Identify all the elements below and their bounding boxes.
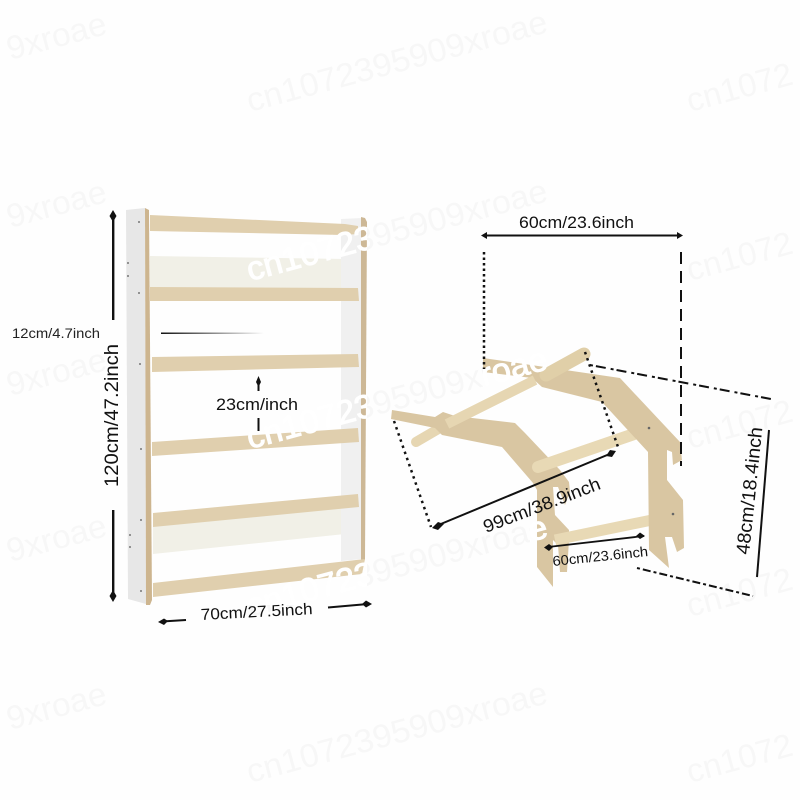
faint watermarks: cn1072 [682, 392, 796, 456]
pull-up bar product [391, 354, 684, 587]
watermarks over products: cn1072395909xroae [242, 508, 551, 624]
faint watermarks: cn1072 [682, 726, 796, 790]
top rod rear section [416, 428, 440, 442]
bar top width dimension [481, 213, 683, 239]
faint watermarks: cn1072395909xroae [242, 340, 551, 456]
lower rod [555, 520, 652, 540]
faint watermarks: 9xroae [2, 5, 110, 67]
bar lower width dimension: 60cm/23.6inch [552, 543, 649, 569]
faint watermarks: cn1072395909xroae [242, 3, 551, 119]
faint watermarks: 9xroae [2, 341, 110, 403]
bar length dimension: 99cm/38.9inch [480, 474, 603, 537]
rack rungs [150, 215, 365, 597]
rack back panels [150, 256, 347, 554]
back bracket [483, 358, 684, 568]
rack height dimension [102, 210, 123, 602]
watermarks over products: cn1072395909xroae [242, 172, 551, 288]
wall rack product [126, 208, 367, 605]
rack height dimension: 120cm/47.2inch [102, 344, 123, 487]
rung spacing dimension: 23cm/inch [216, 395, 298, 414]
rack width dimension: 70cm/27.5inch [200, 601, 313, 624]
faint watermarks: 9xroae [2, 507, 110, 569]
rack left side panel [126, 208, 152, 605]
infographic canvas [13, 208, 771, 625]
faint watermarks: cn1072 [682, 224, 796, 288]
faint watermarks: 9xroae [2, 173, 110, 235]
bar length dimension [432, 450, 616, 537]
bar top width dimension: 60cm/23.6inch [519, 213, 634, 232]
top rod [447, 354, 584, 424]
faint watermarks: cn1072395909xroae [242, 172, 551, 288]
watermarks over products: cn1072395909xroae [242, 340, 551, 456]
faint watermarks: cn1072 [682, 560, 796, 624]
watermarks over products [248, 226, 547, 581]
middle rod [538, 432, 640, 467]
bar lower width dimension [544, 532, 649, 569]
faint watermarks: 9xroae [2, 675, 110, 737]
rack depth label: 12cm/4.7inch [12, 325, 100, 341]
front bracket [391, 410, 570, 587]
rung spacing dimension [216, 376, 298, 431]
rack width dimension [158, 600, 372, 625]
bar guide lines [394, 252, 771, 596]
faint watermarks: cn1072395909xroae [242, 674, 551, 790]
rack right side panel [341, 217, 367, 561]
bar height dimension: 48cm/18.4inch [733, 426, 767, 556]
faint watermarks: cn1072395909xroae [242, 508, 551, 624]
faint watermarks: cn1072 [682, 55, 796, 119]
